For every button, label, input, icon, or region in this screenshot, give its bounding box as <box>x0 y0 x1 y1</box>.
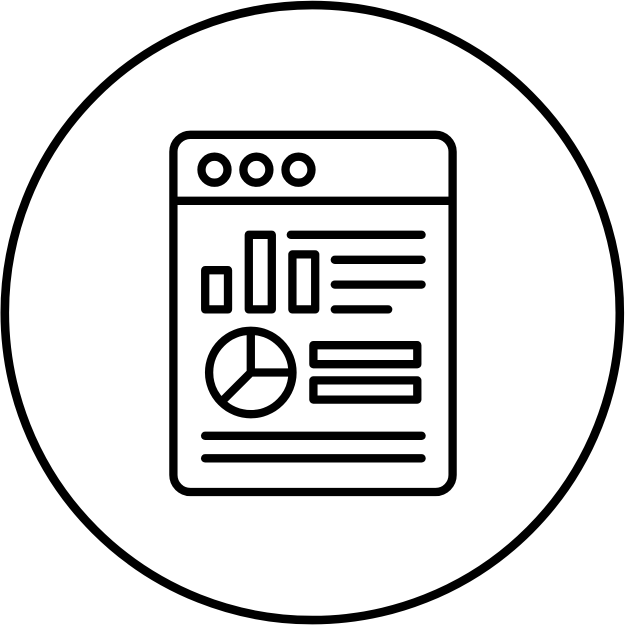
window control buttons <box>202 157 312 183</box>
pie chart <box>209 331 292 414</box>
legend boxes <box>313 345 417 400</box>
window frame <box>173 135 453 492</box>
bottom text lines <box>205 436 422 458</box>
bar chart <box>205 235 315 309</box>
browser window <box>173 135 453 492</box>
text lines beside bar chart <box>291 235 422 309</box>
header divider <box>173 197 453 205</box>
